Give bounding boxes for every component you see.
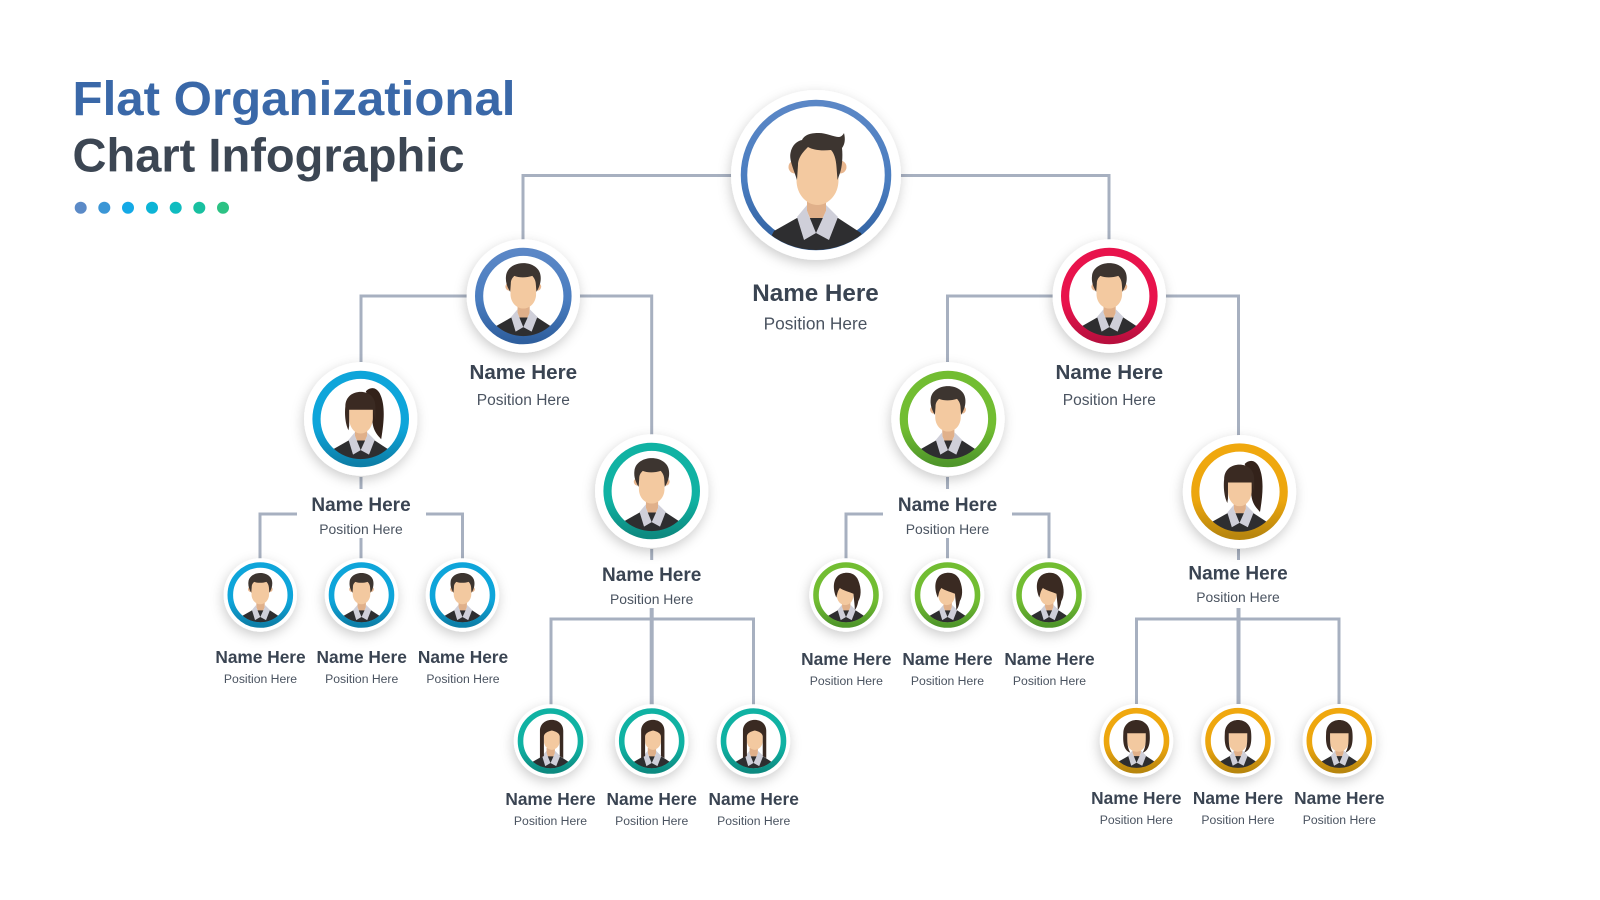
position: top executive: Position Here — [764, 314, 867, 334]
avatar: teal lead — [595, 434, 708, 548]
team: cyan members — [215, 558, 509, 686]
name: amber member 3: Name Here — [1294, 788, 1385, 808]
name: teal member 3: Name Here — [709, 789, 799, 809]
avatar: top executive — [731, 90, 901, 265]
position: amber member 2: Position Here — [1201, 813, 1275, 827]
position: cyan lead: Position Here — [319, 521, 403, 537]
avatar: teal member 1 — [514, 704, 587, 778]
position: amber member 3: Position Here — [1303, 813, 1376, 827]
avatar: cyan member 2 — [325, 558, 398, 632]
connector lines — [260, 176, 1339, 705]
team: teal members — [505, 704, 799, 828]
name: right manager: Name Here — [1055, 361, 1163, 384]
avatar: cyan member 1 — [224, 558, 297, 632]
avatar: green lead — [891, 362, 1005, 476]
title: Chart Infographic — [72, 130, 464, 182]
avatar: cyan member 3 — [426, 558, 499, 632]
avatar: green member 2 — [911, 558, 984, 632]
position: teal member 3: Position Here — [717, 814, 790, 828]
position: green member 2: Position Here — [911, 674, 984, 688]
name: top executive: Name Here — [752, 280, 879, 307]
avatar: cyan lead — [304, 362, 417, 476]
name: left manager: Name Here — [469, 361, 577, 384]
position: left manager: Position Here — [477, 392, 570, 409]
position: amber member 1: Position Here — [1100, 813, 1173, 827]
position: teal lead: Position Here — [610, 591, 694, 607]
team: amber members — [1091, 704, 1385, 827]
title — [72, 72, 516, 182]
avatar: green member 1 — [809, 558, 883, 632]
avatar: teal member 2 — [615, 704, 688, 778]
name: cyan member 3: Name Here — [418, 647, 509, 667]
node: top executive — [731, 90, 901, 334]
position: cyan member 3: Position Here — [426, 672, 500, 686]
position: green member 1: Position Here — [810, 674, 883, 688]
position: cyan member 1: Position Here — [224, 672, 297, 686]
avatar: left manager — [467, 239, 580, 353]
name: green member 2: Name Here — [902, 649, 993, 669]
name: cyan lead: Name Here — [311, 495, 411, 516]
node: teal lead — [595, 434, 708, 607]
avatar: teal member 3 — [717, 704, 790, 778]
position: green member 3: Position Here — [1013, 674, 1086, 688]
name: amber lead: Name Here — [1188, 563, 1288, 584]
node: right manager — [1053, 239, 1166, 409]
name: teal member 1: Name Here — [505, 789, 596, 809]
name: green member 1: Name Here — [801, 649, 892, 669]
node: green lead — [891, 362, 1005, 537]
name: teal lead: Name Here — [602, 565, 701, 586]
position: cyan member 2: Position Here — [325, 672, 398, 686]
node: cyan lead — [304, 362, 417, 537]
name: cyan member 1: Name Here — [215, 647, 306, 667]
name: amber member 1: Name Here — [1091, 788, 1182, 808]
avatar: right manager — [1053, 239, 1166, 353]
avatar: green member 3 — [1012, 558, 1086, 632]
position: teal member 1: Position Here — [514, 814, 587, 828]
name: green lead: Name Here — [898, 495, 997, 516]
position: amber lead: Position Here — [1196, 589, 1280, 605]
position: green lead: Position Here — [906, 521, 989, 537]
node: left manager — [467, 239, 580, 409]
name: teal member 2: Name Here — [607, 789, 697, 809]
avatar: amber lead — [1183, 435, 1296, 548]
decorative dot row — [75, 202, 229, 214]
avatar: amber member 3 — [1303, 704, 1376, 777]
team: green members — [801, 558, 1095, 688]
title: Flat Organizational — [72, 72, 516, 126]
name: amber member 2: Name Here — [1193, 788, 1284, 808]
position: right manager: Position Here — [1063, 392, 1156, 409]
avatar: amber member 2 — [1201, 704, 1275, 777]
position: teal member 2: Position Here — [615, 814, 688, 828]
node: amber lead — [1183, 435, 1296, 605]
avatar: amber member 1 — [1100, 704, 1173, 777]
name: cyan member 2: Name Here — [317, 647, 407, 667]
name: green member 3: Name Here — [1004, 649, 1095, 669]
